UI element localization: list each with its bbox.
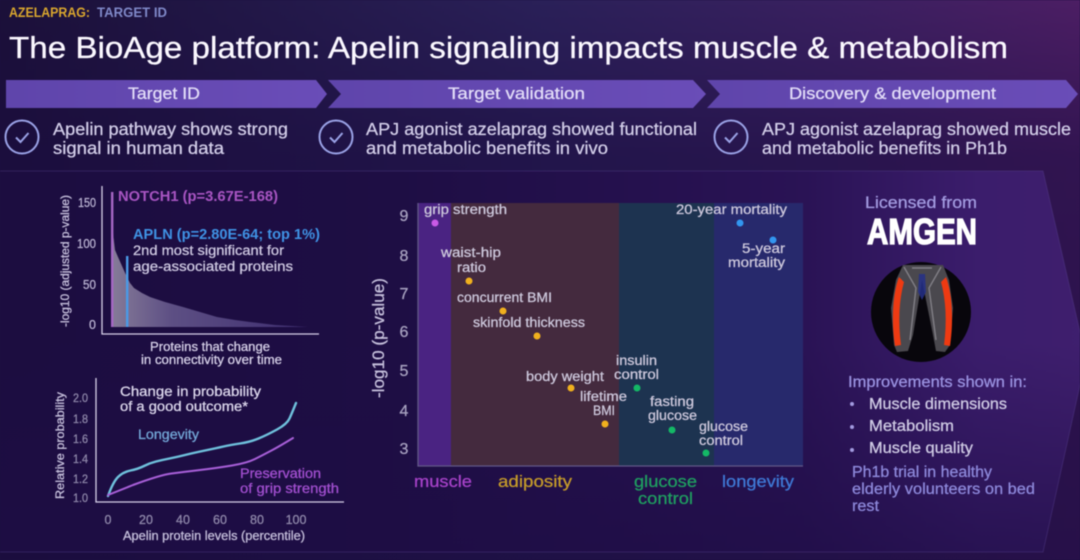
label: preservation of grip strength <box>240 465 339 496</box>
chart: probability curves <box>53 378 344 543</box>
data labels: 20-year mortality <box>676 202 787 217</box>
line: longevity <box>108 403 296 496</box>
category: longevity: longevity <box>722 472 795 491</box>
data labels: waist-hip <box>440 245 501 260</box>
chart: scatter of p-values by category <box>370 202 803 508</box>
y-axis ticks: 5 <box>400 363 409 380</box>
data labels: fasting <box>650 394 694 409</box>
y-axis title: Relative probability <box>53 392 67 499</box>
y-axis ticks: 4 <box>400 403 409 420</box>
y-axis ticks: 6 <box>400 324 409 341</box>
category: glucose control: control <box>638 489 693 508</box>
text block: trial note: Ph1b trial in healthy <box>852 464 992 481</box>
text block: improvements <box>848 374 1027 457</box>
y-axis ticks <box>73 391 88 505</box>
y-axis ticks: 1.4 <box>73 452 88 466</box>
finding 2: and metabolic benefits in vivo <box>366 138 608 158</box>
line: grip strength <box>108 438 293 495</box>
icon: check circle <box>714 120 748 154</box>
y-axis ticks: 150 <box>78 196 96 210</box>
axes <box>96 378 344 502</box>
eyebrow: section label: TARGET ID <box>97 5 167 20</box>
title: The BioAge platform: Apelin signaling impacts muscle & metabolism <box>9 30 1008 65</box>
chart heading: Change in probability <box>120 383 261 399</box>
x-axis ticks: 40 <box>176 513 190 527</box>
chart heading: of a good outcome* <box>120 398 249 414</box>
finding 2: APJ agonist azelaprag showed functional <box>366 119 697 139</box>
callout: APLN: 2nd most significant for <box>133 243 285 258</box>
stage arrows <box>6 80 1078 108</box>
bar: APLN <box>126 256 128 327</box>
x-axis ticks: 60 <box>213 513 227 527</box>
chart: protein significance bars <box>58 186 320 367</box>
x-axis ticks: 80 <box>250 513 264 527</box>
x-axis ticks: 0 <box>105 513 112 527</box>
data labels: ratio <box>457 260 486 275</box>
x-axis title <box>141 340 282 367</box>
panel: evidence chevron <box>0 171 1080 552</box>
data labels: lifetime <box>580 389 627 404</box>
finding 3: APJ agonist azelaprag showed muscle <box>762 119 1071 139</box>
data labels: insulin <box>616 353 657 368</box>
category: adiposity: adiposity <box>498 472 573 491</box>
bar: NOTCH1 <box>111 192 113 327</box>
data labels: skinfold thickness <box>473 315 585 330</box>
y-axis ticks: 50 <box>83 278 96 292</box>
arrow: Target ID <box>6 80 327 108</box>
label: preservation of grip strength: Preservation <box>240 465 321 481</box>
arrow: Discovery & development: Discovery & development <box>789 85 996 103</box>
icon: check circle <box>6 120 38 154</box>
data labels: control <box>614 367 659 382</box>
axes <box>102 186 319 334</box>
data labels: body weight <box>526 369 604 384</box>
x-axis ticks <box>105 513 306 527</box>
band: adiposity <box>451 203 619 466</box>
chart heading <box>120 383 261 414</box>
data labels: glucose <box>699 419 748 434</box>
callout: APLN <box>133 227 320 274</box>
bar area <box>113 233 308 327</box>
icon: leg muscles <box>871 262 971 362</box>
finding 3 <box>714 119 1071 158</box>
band: glucose control <box>619 203 714 466</box>
data labels: control <box>699 433 743 448</box>
icon: check circle <box>320 120 352 154</box>
y-axis ticks <box>400 208 409 458</box>
y-axis ticks: 8 <box>400 248 409 265</box>
bullet list: Muscle quality <box>869 440 973 457</box>
eyebrow: section label: AZELAPRAG: <box>9 5 90 20</box>
bullet list: Muscle dimensions <box>869 396 1007 413</box>
category: glucose control: glucose <box>634 472 697 491</box>
finding 1: signal in human data <box>53 138 224 158</box>
y-axis ticks: 100 <box>77 237 96 251</box>
callout: APLN: age-associated proteins <box>133 259 293 274</box>
y-axis ticks: 1.6 <box>73 432 88 446</box>
bullet list <box>850 396 1007 457</box>
x-axis title: in connectivity over time <box>141 353 282 367</box>
bullet list: Metabolism <box>869 418 954 435</box>
y-axis ticks: 1.2 <box>73 472 88 486</box>
data labels: BMI <box>593 403 615 418</box>
axes <box>418 203 803 466</box>
y-axis ticks: 0 <box>89 318 96 332</box>
arrow: Discovery & development <box>707 80 1078 108</box>
category: muscle: muscle <box>414 472 472 491</box>
logo: Amgen wordmark: AMGEN <box>867 211 977 252</box>
licensing note: Licensed from <box>865 193 977 212</box>
text block: trial note: elderly volunteers on bed <box>852 481 1035 498</box>
label: preservation of grip strength: of grip strength <box>240 480 339 496</box>
arrow: Target ID: Target ID <box>128 85 200 103</box>
y-axis ticks: 3 <box>400 441 409 458</box>
y-axis ticks: 9 <box>400 208 409 225</box>
y-axis ticks: 1.0 <box>73 491 88 505</box>
text block: improvements: Improvements shown in: <box>848 374 1027 391</box>
finding 2 <box>320 119 697 158</box>
x-axis title: Apelin protein levels (percentile) <box>123 528 305 543</box>
eyebrow: section label <box>9 5 167 20</box>
callout: NOTCH1: NOTCH1 (p=3.67E-168) <box>118 189 278 205</box>
label: longevity: Longevity <box>138 426 199 442</box>
x-axis ticks: 100 <box>286 513 306 527</box>
arrow: Target validation: Target validation <box>448 85 585 103</box>
data labels <box>424 202 787 448</box>
finding 1 <box>6 119 288 158</box>
y-axis ticks: 7 <box>400 286 409 303</box>
arrow: Target validation <box>328 80 706 108</box>
callout: APLN: APLN (p=2.80E-64; top 1%) <box>133 227 320 243</box>
data labels: 5-year <box>742 241 786 256</box>
finding 1: Apelin pathway shows strong <box>53 119 288 139</box>
band: muscle <box>418 203 451 466</box>
band: longevity <box>714 203 803 466</box>
data points <box>432 220 776 456</box>
data labels: grip strength <box>424 202 507 217</box>
x-axis title: Proteins that change <box>150 340 270 354</box>
data labels: mortality <box>728 255 785 270</box>
y-axis ticks: 2.0 <box>73 391 88 405</box>
finding 3: and metabolic benefits in Ph1b <box>762 138 1007 158</box>
text block: trial note <box>852 464 1035 515</box>
y-axis ticks: 1.8 <box>73 412 88 426</box>
y-axis ticks <box>77 196 96 332</box>
y-axis title: -log10 (p-value) <box>370 278 388 398</box>
data labels: glucose <box>648 408 697 423</box>
category: glucose control <box>634 472 697 508</box>
x-axis ticks: 20 <box>139 513 153 527</box>
y-axis title: -log10 (adjusted p-value) <box>58 195 72 327</box>
text block: trial note: rest <box>852 498 880 515</box>
data labels: concurrent BMI <box>457 290 552 305</box>
